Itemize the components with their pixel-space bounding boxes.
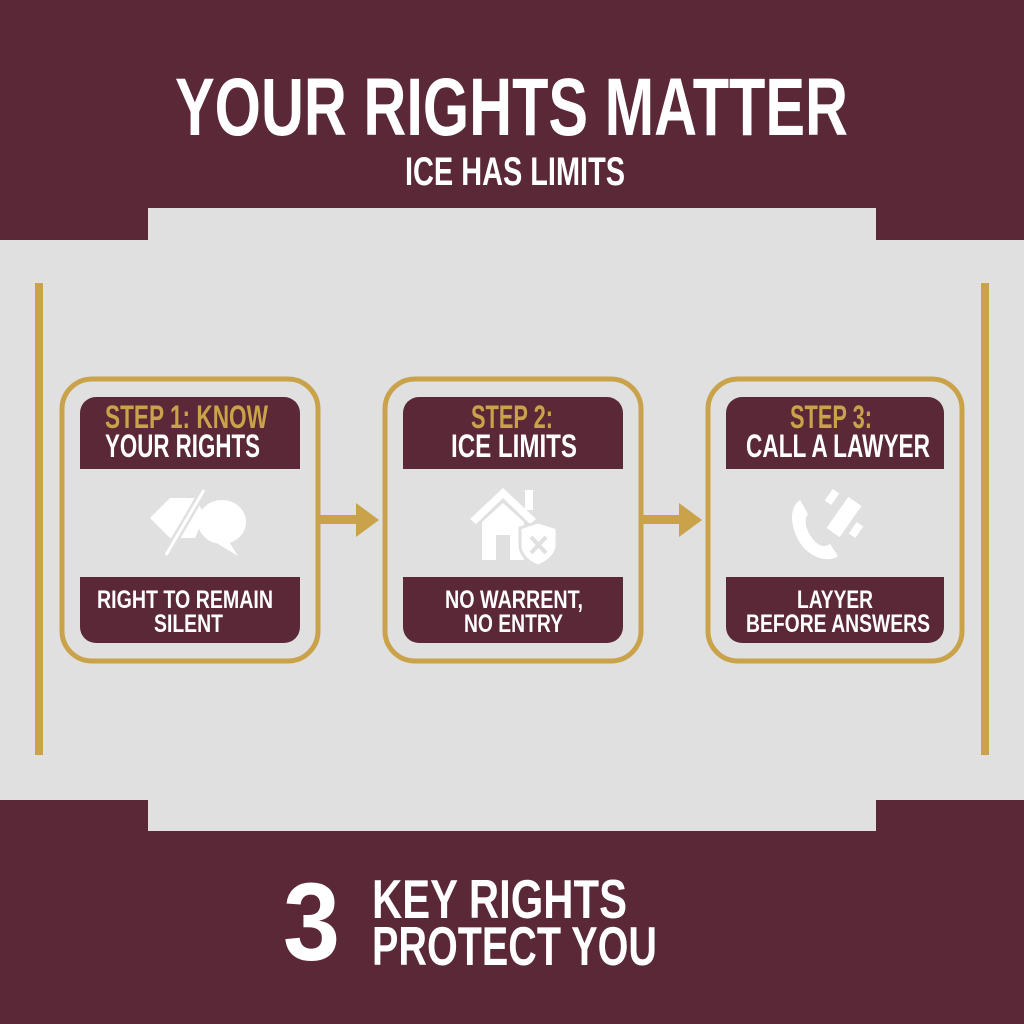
arrow 1 — [320, 503, 379, 537]
panel: step 3: STEP 3: — [790, 399, 872, 435]
panel: step 1: STEP 1: KNOW — [105, 399, 269, 435]
panel: light background — [0, 208, 1024, 831]
icon: phone and gavel — [792, 489, 863, 559]
arrow 2 — [643, 503, 702, 537]
panel: step 3: LAYYER — [797, 586, 873, 614]
panel: step 3: CALL A LAWYER — [746, 428, 930, 464]
panel: step 2: ICE LIMITS — [451, 428, 577, 464]
panel: step 3: BEFORE ANSWERS — [746, 610, 930, 638]
gold side line left — [35, 283, 43, 755]
panel: step 2: NO WARRENT, — [445, 586, 583, 614]
panel: step 2: NO ENTRY — [464, 610, 563, 638]
subtitle: ICE HAS LIMITS — [405, 150, 625, 194]
panel: step 1: RIGHT TO REMAIN — [97, 586, 273, 614]
panel: step 2: STEP 2: — [471, 399, 553, 435]
icon: silent speech bubbles — [150, 490, 246, 556]
footer text: PROTECT YOU — [372, 915, 657, 977]
footer text — [372, 868, 657, 977]
panel: step 1 — [62, 379, 318, 661]
panel: step 1: YOUR RIGHTS — [105, 428, 260, 464]
panel: step 2 — [385, 379, 641, 661]
panel: step 3 — [708, 379, 962, 661]
footer number: 3 — [283, 861, 340, 984]
icon: house with shield — [470, 488, 557, 566]
footer text: KEY RIGHTS — [372, 868, 627, 930]
panel: step 1: SILENT — [154, 610, 223, 638]
gold side line right — [981, 283, 989, 755]
